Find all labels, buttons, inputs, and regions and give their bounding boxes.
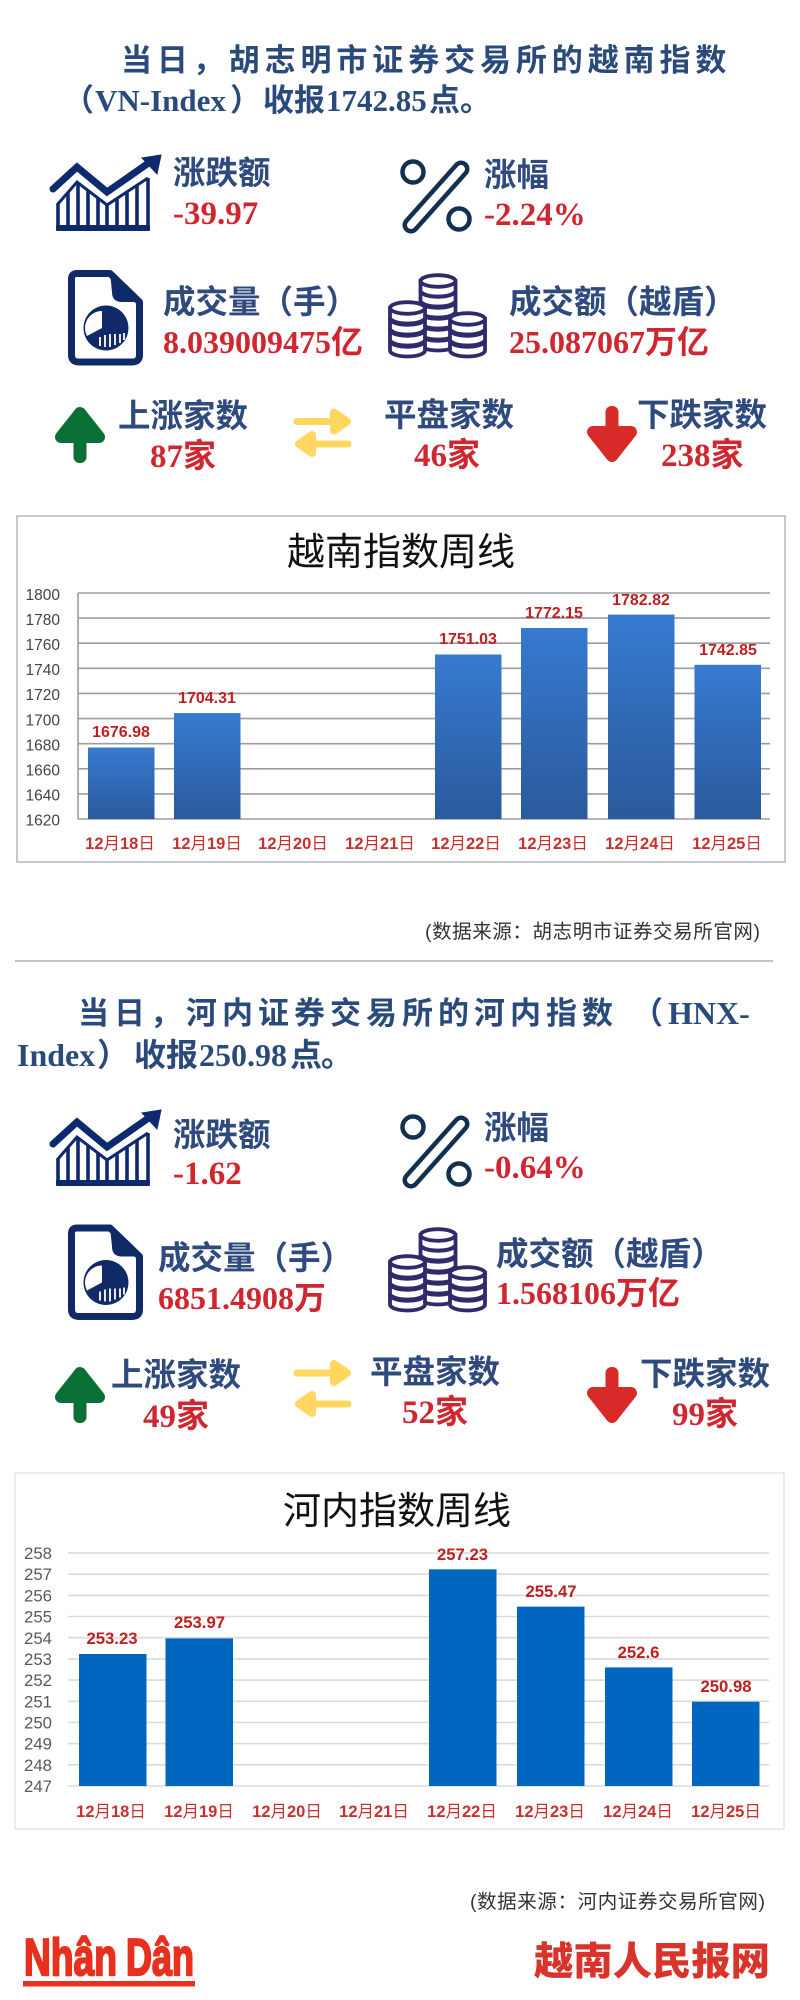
gridlines and axis xyxy=(78,593,770,819)
bar value labels: 1704.31 xyxy=(178,690,236,707)
y axis labels: 258 xyxy=(24,1544,52,1563)
title: VN-Index summary: 点 xyxy=(429,83,460,118)
icon: rising trend chart xyxy=(53,155,161,231)
value: unchanged: 46家 xyxy=(414,437,480,474)
chart title: 河内指数周线 xyxy=(283,1491,511,1533)
icon: document with pie chart xyxy=(72,1226,141,1316)
bar value labels: 1772.15 xyxy=(525,605,583,622)
title: HNX-Index summary: 。 xyxy=(321,1037,353,1073)
label: change amount: 涨跌额 xyxy=(173,1117,271,1153)
bar value labels: 252.6 xyxy=(618,1643,659,1662)
value: unchanged: 52家 xyxy=(402,1394,468,1431)
y axis labels: 253 xyxy=(24,1650,52,1669)
title: HNX-Index summary: ） xyxy=(97,1037,129,1073)
value: advancers: 87家 xyxy=(150,438,216,475)
x axis dates: 12月18日 xyxy=(76,1803,146,1821)
title: VN-Index summary: ） xyxy=(230,83,261,118)
label: advancers: 上涨家数 xyxy=(118,398,248,434)
y axis labels: 247 xyxy=(24,1777,52,1796)
y axis labels: 251 xyxy=(24,1692,52,1712)
title: VN-Index summary: VN-Index xyxy=(95,83,226,118)
label: advancers: 上涨家数 xyxy=(111,1357,241,1393)
bar value labels: 255.47 xyxy=(525,1582,577,1601)
icon: green up arrow xyxy=(61,1373,99,1423)
y axis labels: 254 xyxy=(24,1629,52,1648)
y axis labels xyxy=(26,587,60,830)
label: turnover: 成交额（越盾） xyxy=(496,1236,724,1272)
bar value labels: 253.97 xyxy=(174,1613,225,1632)
title: VN-Index summary: 。 xyxy=(460,83,491,118)
value: decliners: 99家 xyxy=(672,1396,738,1433)
x axis dates: 12月19日 xyxy=(172,835,242,853)
y axis labels: 1720 xyxy=(26,687,60,704)
icon: coin stacks xyxy=(390,275,485,356)
label: decliners: 下跌家数 xyxy=(637,397,767,433)
value: volume: 8.039009475亿 xyxy=(163,324,363,360)
icon: red down arrow xyxy=(593,406,631,456)
x axis dates: 12月21日 xyxy=(339,1803,409,1821)
icon: coin stacks xyxy=(390,1229,485,1310)
x axis dates: 12月22日 xyxy=(427,1803,497,1821)
bar value labels: 250.98 xyxy=(700,1677,752,1696)
x axis dates: 12月23日 xyxy=(518,835,588,853)
panel: VN-Index weekly bar chart xyxy=(17,516,785,862)
bar value labels: 1742.85 xyxy=(699,642,757,659)
title: HNX-Index summary: 点 xyxy=(290,1037,322,1073)
title: HNX-Index summary xyxy=(17,995,750,1073)
value: change amount: -39.97 xyxy=(173,196,258,232)
value: advancers: 49家 xyxy=(143,1398,209,1435)
label: change amount: 涨跌额 xyxy=(173,155,271,191)
footer: publication name: 越南人民报网 xyxy=(534,1941,770,1984)
icon: yellow exchange arrows xyxy=(297,1364,348,1413)
y axis labels: 255 xyxy=(24,1608,52,1626)
y axis labels: 256 xyxy=(24,1586,52,1606)
icon: rising trend chart xyxy=(53,1110,161,1186)
x axis dates: 12月25日 xyxy=(692,835,762,853)
value: turnover: 25.087067万亿 xyxy=(509,324,709,360)
y axis labels: 1660 xyxy=(26,762,60,780)
gridlines xyxy=(68,1553,769,1786)
title: VN-Index summary: 当日，胡志明市证券交易所的越南指数 xyxy=(121,43,731,78)
title: VN-Index summary: 收报 xyxy=(263,83,325,118)
x axis dates: 12月20日 xyxy=(258,835,328,853)
icon: document with pie chart xyxy=(72,272,141,362)
y axis labels: 1680 xyxy=(26,738,60,754)
chart title: 越南指数周线 xyxy=(287,532,515,574)
source note: HNX-Index: (数据来源：河内证券交易所官网) xyxy=(470,1891,765,1913)
y axis labels: 1780 xyxy=(26,612,60,629)
title: HNX-Index summary: Index xyxy=(17,1037,95,1073)
source note: VN-Index: (数据来源：胡志明市证券交易所官网) xyxy=(425,921,760,943)
y axis labels: 252 xyxy=(24,1671,52,1690)
value: turnover: 1.568106万亿 xyxy=(496,1275,680,1311)
y axis labels: 257 xyxy=(24,1565,52,1584)
x axis dates xyxy=(76,1803,761,1821)
title: HNX-Index summary: （ xyxy=(632,996,663,1031)
bar value labels: 1676.98 xyxy=(92,724,150,741)
icon: yellow exchange arrows xyxy=(297,412,348,453)
y axis labels: 248 xyxy=(24,1756,52,1775)
value: change amount: -1.62 xyxy=(173,1156,242,1192)
bar value labels xyxy=(92,592,757,741)
x axis dates xyxy=(85,835,762,853)
y axis labels: 1620 xyxy=(26,812,60,830)
bars xyxy=(88,615,761,819)
icon: green up arrow xyxy=(61,413,99,463)
title: HNX-Index summary: HNX- xyxy=(668,995,750,1031)
title: HNX-Index summary: 250.98 xyxy=(199,1037,287,1073)
label: volume: 成交量（手） xyxy=(158,1240,353,1276)
x axis dates: 12月23日 xyxy=(515,1803,585,1821)
y axis labels: 1700 xyxy=(26,712,60,730)
bar value labels xyxy=(86,1545,752,1696)
y axis labels: 1760 xyxy=(26,637,60,654)
title: HNX-Index summary: 收报 xyxy=(134,1037,198,1073)
title: VN-Index summary: 1742.85 xyxy=(326,83,427,118)
x axis dates: 12月22日 xyxy=(431,835,501,853)
bar value labels: 257.23 xyxy=(437,1545,488,1564)
x axis dates: 12月18日 xyxy=(85,835,155,853)
icon: percent xyxy=(402,162,470,230)
value: volume: 6851.4908万 xyxy=(158,1280,326,1316)
label: unchanged: 平盘家数 xyxy=(370,1354,500,1390)
x axis dates: 12月24日 xyxy=(605,835,675,853)
label: decliners: 下跌家数 xyxy=(640,1356,770,1392)
label: unchanged: 平盘家数 xyxy=(384,397,514,433)
title: VN-Index summary: （ xyxy=(63,83,94,118)
x axis dates: 12月21日 xyxy=(345,835,415,853)
y axis labels xyxy=(24,1544,52,1796)
icon: red down arrow xyxy=(593,1367,631,1417)
y axis labels: 249 xyxy=(24,1734,52,1754)
x axis dates: 12月19日 xyxy=(164,1803,234,1821)
bars xyxy=(79,1569,760,1786)
y axis labels: 1740 xyxy=(26,662,60,679)
logo: Nhan Dan: Nhân xyxy=(24,1929,117,1987)
value: decliners: 238家 xyxy=(661,437,744,474)
x axis dates: 12月25日 xyxy=(691,1803,761,1821)
label: change percent: 涨幅 xyxy=(484,157,549,193)
label: change percent: 涨幅 xyxy=(484,1110,549,1146)
title: VN-Index summary xyxy=(63,43,731,118)
label: volume: 成交量（手） xyxy=(163,284,358,320)
label: turnover: 成交额（越盾） xyxy=(509,284,737,320)
title: HNX-Index summary: 当日，河内证券交易所的河内指数 xyxy=(78,996,618,1031)
y axis labels: 1640 xyxy=(26,788,60,804)
panel: HNX-Index weekly bar chart xyxy=(15,1473,784,1829)
icon: percent xyxy=(402,1116,470,1184)
bar value labels: 253.23 xyxy=(86,1629,138,1648)
bar value labels: 1751.03 xyxy=(439,631,497,648)
y axis labels: 1800 xyxy=(26,587,60,604)
x axis dates: 12月24日 xyxy=(603,1803,673,1821)
value: change percent: -0.64% xyxy=(484,1150,586,1186)
bar value labels: 1782.82 xyxy=(612,592,670,609)
logo: Nhan Dan: Dân xyxy=(126,1929,194,1987)
value: change percent: -2.24% xyxy=(484,197,586,233)
y axis labels: 250 xyxy=(24,1714,52,1732)
x axis dates: 12月20日 xyxy=(252,1803,322,1821)
